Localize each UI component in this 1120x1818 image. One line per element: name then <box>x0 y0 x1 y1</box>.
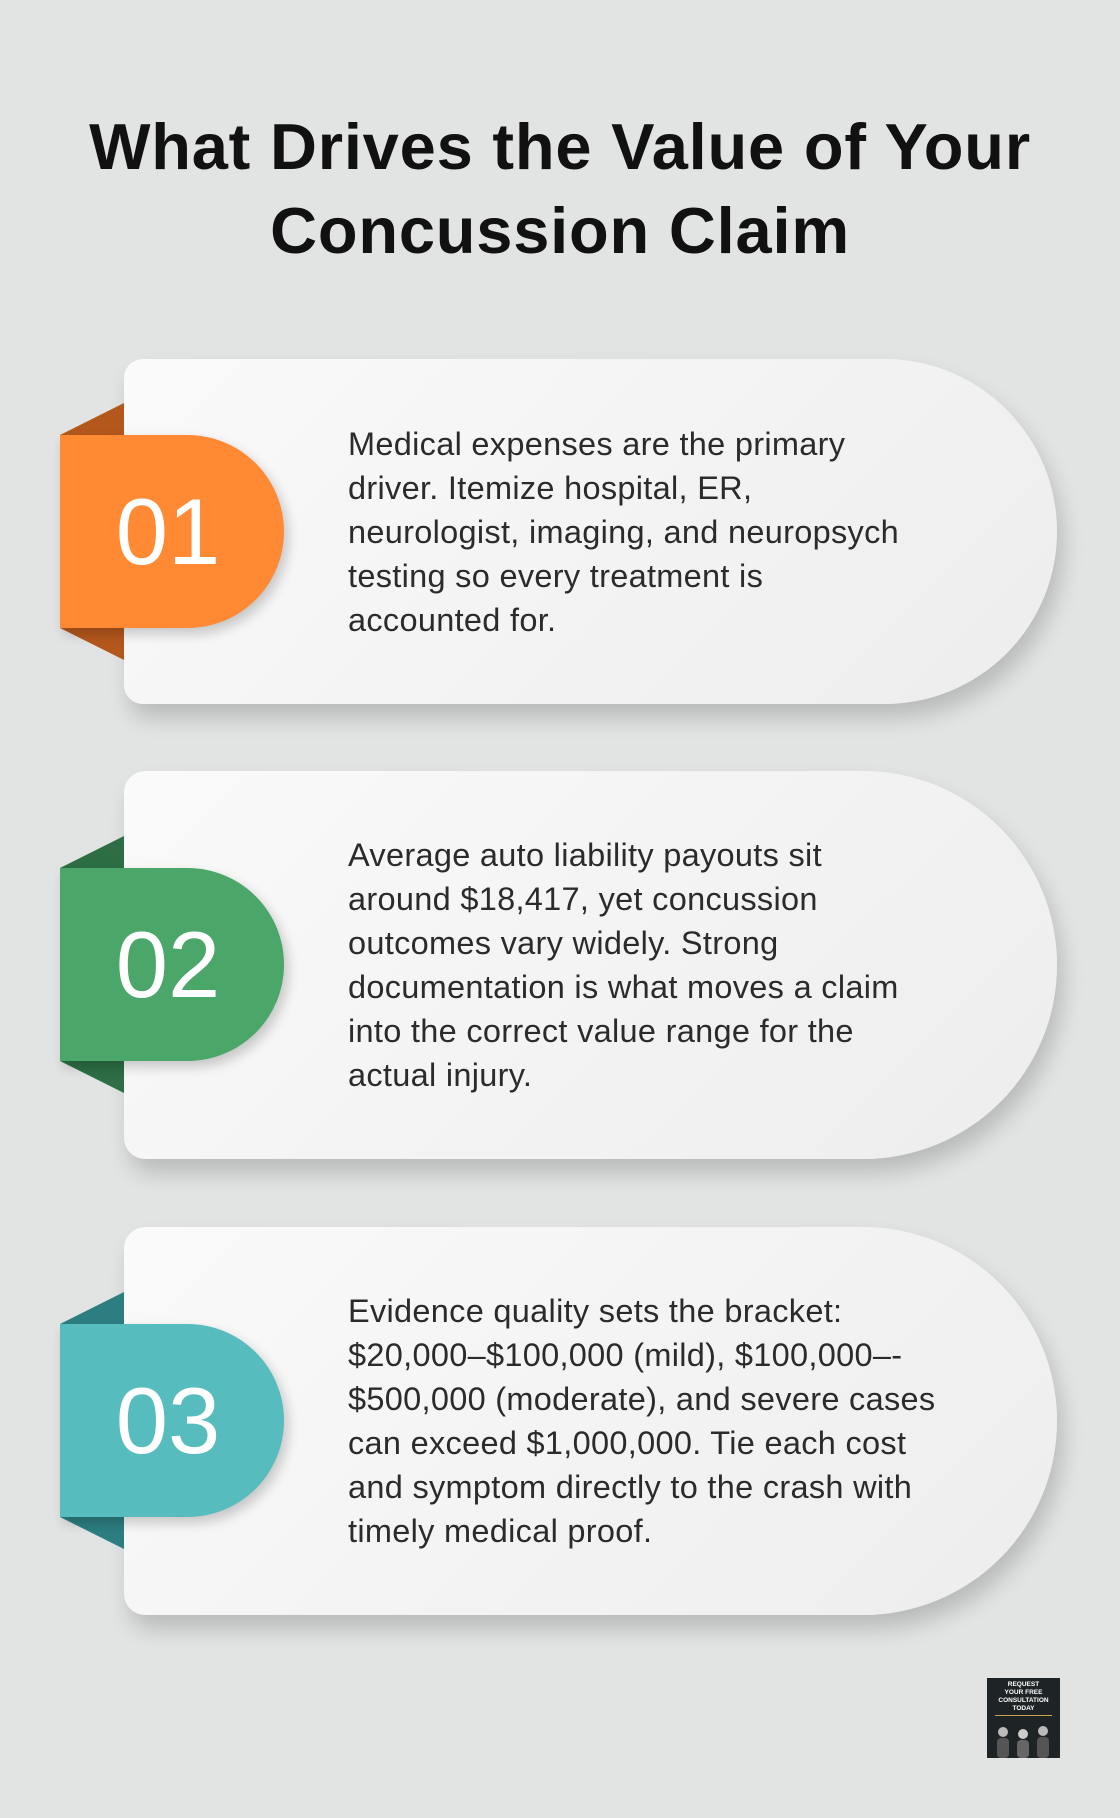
text block 2: around $18,417, yet concussion <box>348 881 818 917</box>
logo badge <box>987 1678 1060 1758</box>
text block 2 <box>348 837 899 1093</box>
text block 3: $20,000–$100,000 (mild), $100,000–- <box>348 1337 902 1373</box>
text block 1 <box>348 426 899 638</box>
logo badge: CONSULTATION <box>998 1697 1049 1704</box>
text block 2: outcomes vary widely. Strong <box>348 925 778 961</box>
text block 2: into the correct value range for the <box>348 1013 854 1049</box>
card 1 background <box>124 359 1057 704</box>
text block 1: Medical expenses are the primary <box>348 426 845 462</box>
logo badge: YOUR FREE <box>1005 1689 1042 1696</box>
text block 3: Evidence quality sets the bracket: <box>348 1293 842 1329</box>
logo badge: TODAY <box>1012 1705 1035 1712</box>
text block 2: documentation is what moves a claim <box>348 969 899 1005</box>
text block 3 <box>348 1293 935 1549</box>
number tab 03: 03 <box>116 1368 220 1473</box>
text block 1: accounted for. <box>348 602 556 638</box>
title: What Drives the Value of Your <box>89 110 1031 183</box>
text block 3: $500,000 (moderate), and severe cases <box>348 1381 935 1417</box>
number tab 02: 02 <box>116 912 220 1017</box>
text block 1: testing so every treatment is <box>348 558 763 594</box>
text block 1: neurologist, imaging, and neuropsych <box>348 514 899 550</box>
title <box>89 110 1031 267</box>
text block 2: actual injury. <box>348 1057 532 1093</box>
text block 3: timely medical proof. <box>348 1513 652 1549</box>
number tab 01: 01 <box>116 479 220 584</box>
logo badge: REQUEST <box>1008 1681 1039 1688</box>
text block 3: can exceed $1,000,000. Tie each cost <box>348 1425 906 1461</box>
text block 2: Average auto liability payouts sit <box>348 837 822 873</box>
number tab 01 <box>58 403 294 660</box>
text block 1: driver. Itemize hospital, ER, <box>348 470 752 506</box>
number tab 03 <box>58 1292 294 1549</box>
card 3 background <box>124 1227 1057 1615</box>
number tab 02 <box>58 836 294 1093</box>
card 2 background <box>124 771 1057 1159</box>
title: Concussion Claim <box>270 194 850 267</box>
text block 3: and symptom directly to the crash with <box>348 1469 912 1505</box>
